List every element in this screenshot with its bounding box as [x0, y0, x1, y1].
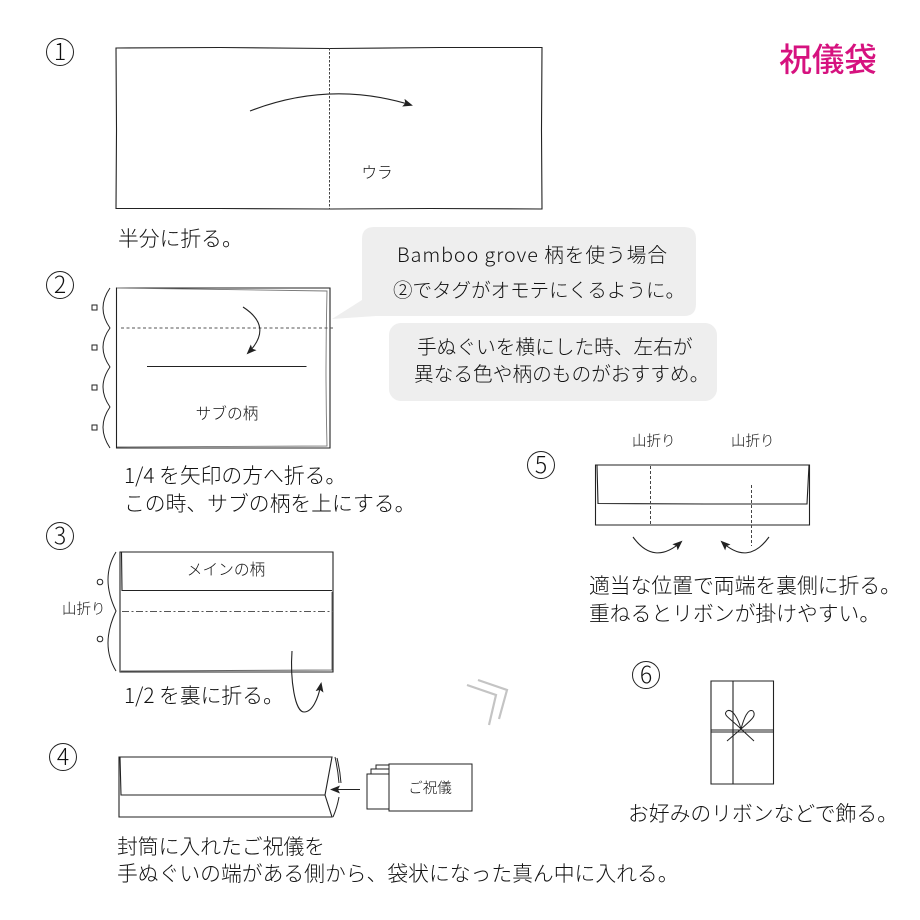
diagram: folded cloth [120, 552, 333, 672]
step 5 caption: 重ねるとリボンが掛けやすい。 [589, 597, 880, 627]
step number 3 [46, 517, 74, 551]
step 4 caption: 封筒に入れたご祝儀を [117, 830, 325, 860]
scallop bracket with square marks [92, 288, 110, 448]
label: gift money: ご祝儀 [408, 777, 452, 798]
ribbon bow [725, 710, 754, 741]
step 2 caption: この時、サブの柄を上にする。 [124, 487, 415, 517]
diagram: cloth with sub pattern [116, 288, 330, 448]
label: mountain fold: 山折り [62, 598, 106, 619]
label: main pattern: メインの柄 [187, 557, 265, 580]
crease line [147, 366, 306, 368]
callout: Bamboo grove note: Bamboo grove 柄を使う場合 [397, 239, 667, 268]
step number 2: 2 [54, 266, 66, 300]
step 5 caption [589, 569, 901, 627]
callout: colour advice: 異なる色や柄のものがおすすめ。 [414, 358, 709, 387]
chevron arrow [467, 680, 507, 725]
step 6 caption: お好みのリボンなどで飾る。 [628, 797, 898, 827]
bracket with circle marks [97, 552, 116, 671]
arrow: fold behind [292, 651, 321, 712]
step number 2 [46, 266, 74, 300]
arrows: fold to back [633, 537, 769, 553]
arrow: fold down [243, 307, 260, 353]
centre fold line [328, 48, 330, 209]
envelope stack [367, 764, 472, 811]
dashed fold line [121, 327, 333, 329]
step number 5 [528, 446, 554, 480]
step 4 caption [117, 830, 679, 887]
step number 1 [46, 33, 74, 67]
step number 6 [632, 656, 660, 690]
mountain fold line [122, 610, 333, 612]
labels: mountain fold [632, 430, 774, 451]
title: 祝儀袋 [779, 34, 877, 81]
step number 4 [50, 738, 76, 772]
callout: colour advice: 手ぬぐいを横にした時、左右が [417, 331, 693, 360]
label: back side: ウラ [361, 160, 393, 183]
step 1 caption: 半分に折る。 [118, 222, 243, 252]
step number 5: 5 [535, 446, 547, 480]
fold lines [650, 466, 752, 546]
step 4 [50, 738, 679, 887]
labels: mountain fold: 山折り [731, 430, 774, 451]
step 4 caption: 手ぬぐいの端がある側から、袋状になった真ん中に入れる。 [117, 857, 679, 887]
callout: Bamboo grove note: ②でタグがオモテにくるように。 [393, 274, 685, 303]
diagram: folded band [596, 465, 810, 525]
diagram: pouch [119, 757, 341, 817]
step 5 [528, 430, 901, 627]
step 3 caption: 1/2 を裏に折る。 [124, 679, 284, 709]
step 2 caption: 1/4 を矢印の方へ折る。 [124, 459, 346, 489]
step number 1: 1 [54, 33, 66, 67]
diagram: unfolded cloth [116, 48, 542, 209]
step 5 caption: 適当な位置で両端を裏側に折る。 [589, 569, 901, 599]
arrow: fold in half [250, 94, 411, 111]
callout: Bamboo grove note [332, 227, 696, 319]
step 2 caption [124, 459, 415, 517]
arrow: insert [332, 788, 360, 790]
labels: mountain fold: 山折り [632, 430, 676, 451]
step 2 [46, 266, 415, 517]
diagram: wrapped gift [710, 681, 774, 784]
step number 6: 6 [640, 656, 652, 690]
step 6 [628, 656, 898, 827]
step 1 [46, 33, 542, 252]
label: sub pattern: サブの柄 [196, 401, 258, 424]
step 3 [46, 517, 333, 712]
callout: colour advice [389, 323, 717, 401]
step number 4: 4 [57, 738, 69, 772]
step number 3: 3 [54, 517, 66, 551]
